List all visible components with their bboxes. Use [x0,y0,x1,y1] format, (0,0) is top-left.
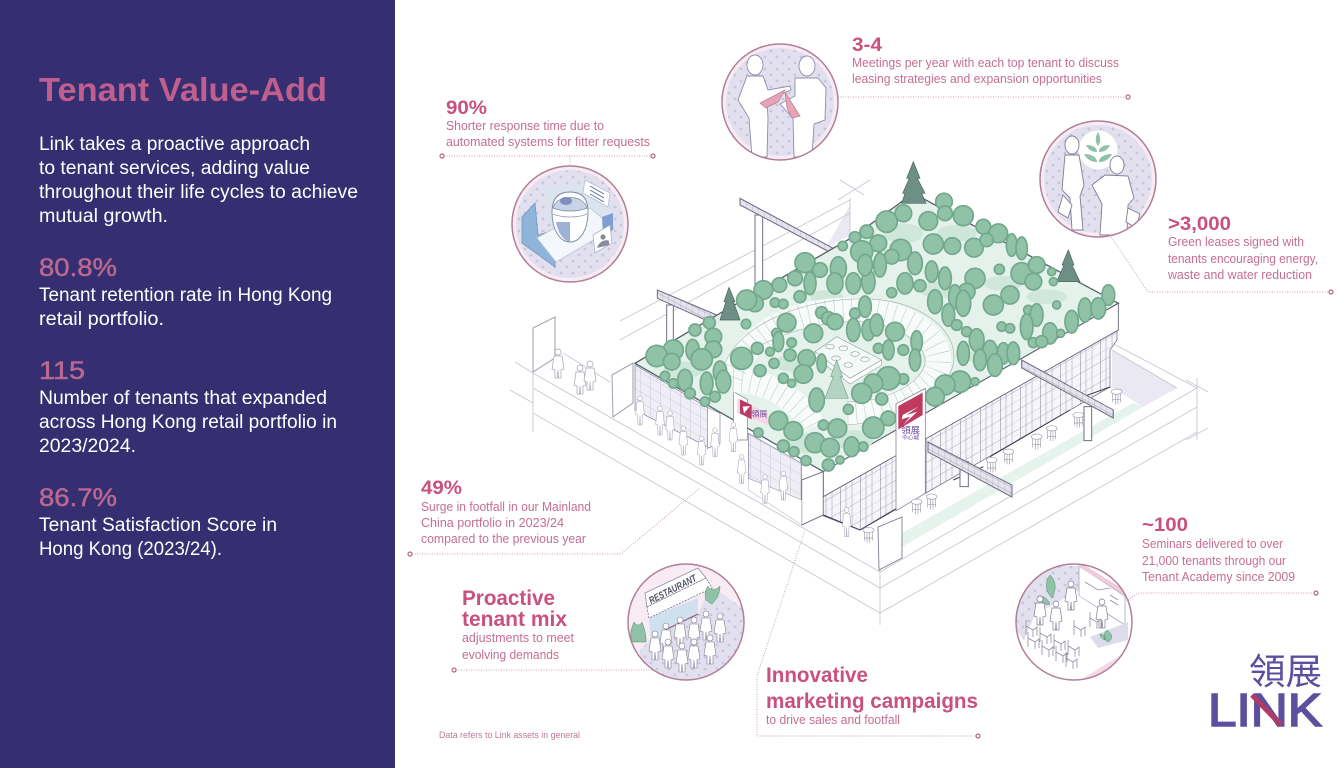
backdrop walls [1112,350,1177,407]
callout: tenant meetings: Meetings per year with each top tenant to discuss [852,56,1119,70]
stat: satisfaction score [39,484,277,560]
entrance frames [533,317,633,417]
intro text: throughout their life cycles to achieve [39,182,358,203]
stat: tenants expanded [39,357,337,457]
callout: tenant meetings: 3-4 [852,35,882,56]
callout: marketing campaigns [757,530,980,738]
callout: footfall surge [408,478,700,556]
callout: green leases: >3,000 [1168,214,1231,235]
callout: footfall surge: Surge in footfall in our Mainland [421,500,591,514]
cafe tables [863,389,1122,543]
intro text: mutual growth. [39,206,168,227]
left wall [635,365,802,500]
callout: tenant academy: 21,000 tenants through our [1142,554,1286,568]
callout: green leases: tenants encouraging energy, [1168,252,1318,266]
callout: marketing campaigns: to drive sales and footfall [766,713,900,727]
sign tower: 領展 [901,424,920,435]
ramp and garden path [723,299,954,427]
footnote: Data refers to Link assets in general [439,730,580,741]
truss: front left [657,290,717,343]
callout: footfall surge: China portfolio in 2023/24 [421,516,564,530]
callout: green leases: waste and water reduction [1167,268,1312,282]
callout: footfall surge: compared to the previous year [421,532,586,546]
visitors at entrance [552,349,596,394]
icon: robot assistant [512,166,628,282]
isometric mall illustration [510,162,1208,625]
entrance sign [737,398,768,425]
callout: marketing campaigns: Innovative [766,664,868,687]
stat: satisfaction score: 86.7% [39,484,117,512]
pine trees [720,162,1080,320]
callout: tenant meetings [838,35,1130,99]
callout: proactive tenant mix [452,587,652,672]
callout: fitter requests: 90% [446,98,487,119]
stat: tenants expanded: across Hong Kong retail portfolio in [39,412,337,433]
stat: satisfaction score: Hong Kong (2023/24). [39,539,222,560]
shoppers along left facade [636,396,851,537]
callout: fitter requests [440,98,655,166]
intro text [39,134,358,227]
trees: left and front [646,317,896,471]
stat: retention rate: Tenant retention rate in Hong Kong [39,285,332,306]
callout: proactive tenant mix: Proactive [462,587,555,610]
icon: green lease [1040,121,1156,237]
trees: inner garden [731,296,922,414]
sign tower: 中心城 [902,433,919,441]
callout: fitter requests: automated systems for fitter requests [446,135,650,149]
sign tower [896,388,925,511]
stat: retention rate: retail portfolio. [39,309,164,330]
callout: tenant academy: Tenant Academy since 2009 [1142,570,1295,584]
stat: tenants expanded: Number of tenants that expanded [39,388,327,409]
stat: retention rate: 80.8% [39,254,117,282]
logo: Link [1208,643,1322,736]
intro text: Link takes a proactive approach [39,134,310,155]
understory [663,223,1067,453]
title: Tenant Value-Add [39,71,327,108]
callout: tenant meetings: leasing strategies and expansion opportunities [852,72,1102,86]
callout: footfall surge: 49% [421,478,462,499]
callout: proactive tenant mix: evolving demands [462,648,559,662]
entrance sign: 領展 [751,409,767,419]
callout: proactive tenant mix: tenant mix [462,608,567,631]
central plaza [815,337,882,384]
icon: restaurant crowd [628,564,745,690]
stat: retention rate [39,254,332,330]
base lines [823,387,1110,530]
left panel background [0,0,395,768]
ground plates [510,180,1208,625]
stat: tenants expanded: 2023/2024. [39,436,136,457]
panel: tenant value-add summary [39,71,358,560]
icon: meeting figures [722,44,838,160]
intro text: to tenant services, adding value [39,158,310,179]
icon: seminar room [1016,562,1132,690]
logo: Link: 領展 [1249,643,1322,695]
door frame [878,517,902,570]
icon: restaurant crowd: RESTAURANT [647,573,699,607]
facade glazing [823,330,1117,530]
stat: tenants expanded: 115 [39,357,85,385]
light pine [825,360,848,398]
roof slab [635,193,1118,472]
callout: proactive tenant mix: adjustments to meet [462,631,575,645]
callout: tenant academy: Seminars delivered to over [1142,537,1283,551]
trusses: front right [928,360,1113,497]
callout: marketing campaigns: marketing campaigns [766,690,978,713]
callout: fitter requests: Shorter response time due to [446,119,604,133]
forecourt planting strip [902,403,1143,547]
fascia band [823,303,1118,497]
truss: rear left [740,198,833,290]
callout: tenant academy [1128,515,1318,600]
callout: green leases: Green leases signed with [1168,235,1304,249]
callout: tenant academy: ~100 [1142,515,1188,536]
stat: satisfaction score: Tenant Satisfaction Score in [39,515,277,536]
logo: Link: LINK [1208,684,1322,736]
trees: rear ridge [737,193,1115,406]
callout: green leases [1110,214,1333,294]
corner block [802,472,823,525]
